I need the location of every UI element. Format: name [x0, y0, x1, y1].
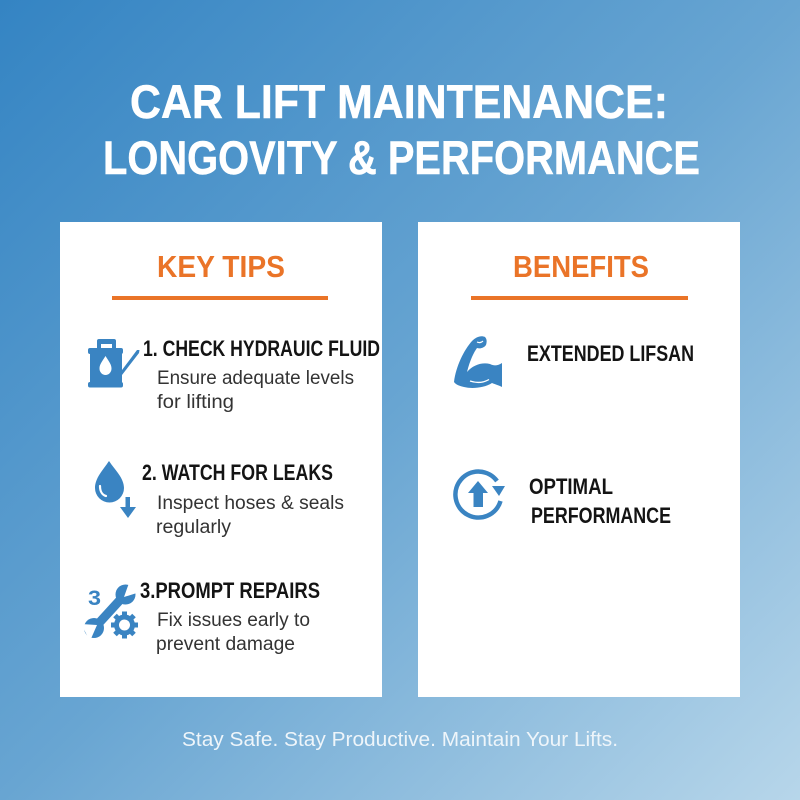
tip 2: regularly [156, 517, 232, 538]
tip 1: for lifting [157, 392, 234, 413]
benefit 2: OPTIMAL [529, 474, 613, 499]
icon: hydraulic fluid can [88, 339, 140, 388]
heading: benefits: BENEFITS [513, 249, 649, 284]
tip 1: 1. CHECK HYDRAUIC FLUID [143, 336, 380, 361]
title: LONGOVITY & PERFORMANCE [103, 131, 700, 184]
tip 2: Inspect hoses & seals [157, 493, 344, 514]
tip 3: prevent damage [156, 634, 295, 655]
icon: leak drop with arrow [95, 461, 136, 518]
tip 3: 3.PROMPT REPAIRS [140, 578, 320, 603]
benefit 2 [529, 474, 671, 528]
icon: wrench and gear: 3 [88, 587, 101, 610]
panel: key tips [60, 222, 382, 697]
tip 1: Ensure adequate levels [157, 368, 354, 389]
tip 3 [140, 578, 320, 655]
icon: circular arrow up [455, 472, 505, 518]
heading: key tips: KEY TIPS [157, 249, 285, 284]
heading underline: benefits [471, 296, 688, 300]
footer tagline: Stay Safe. Stay Productive. Maintain Your Lifts. [182, 729, 618, 751]
benefit 1: EXTENDED LIFSAN [527, 341, 694, 366]
heading underline: key tips [112, 296, 328, 300]
tip 3: Fix issues early to [157, 610, 310, 631]
tip 1 [143, 336, 380, 413]
title [103, 75, 700, 184]
icon: wrench and gear [81, 583, 140, 641]
benefit 2: PERFORMANCE [531, 503, 671, 528]
tip 2: 2. WATCH FOR LEAKS [142, 460, 333, 485]
icon: flexed arm [454, 336, 502, 388]
title: CAR LIFT MAINTENANCE: [130, 75, 668, 128]
tip 2 [142, 460, 344, 538]
panel: benefits [418, 222, 740, 697]
